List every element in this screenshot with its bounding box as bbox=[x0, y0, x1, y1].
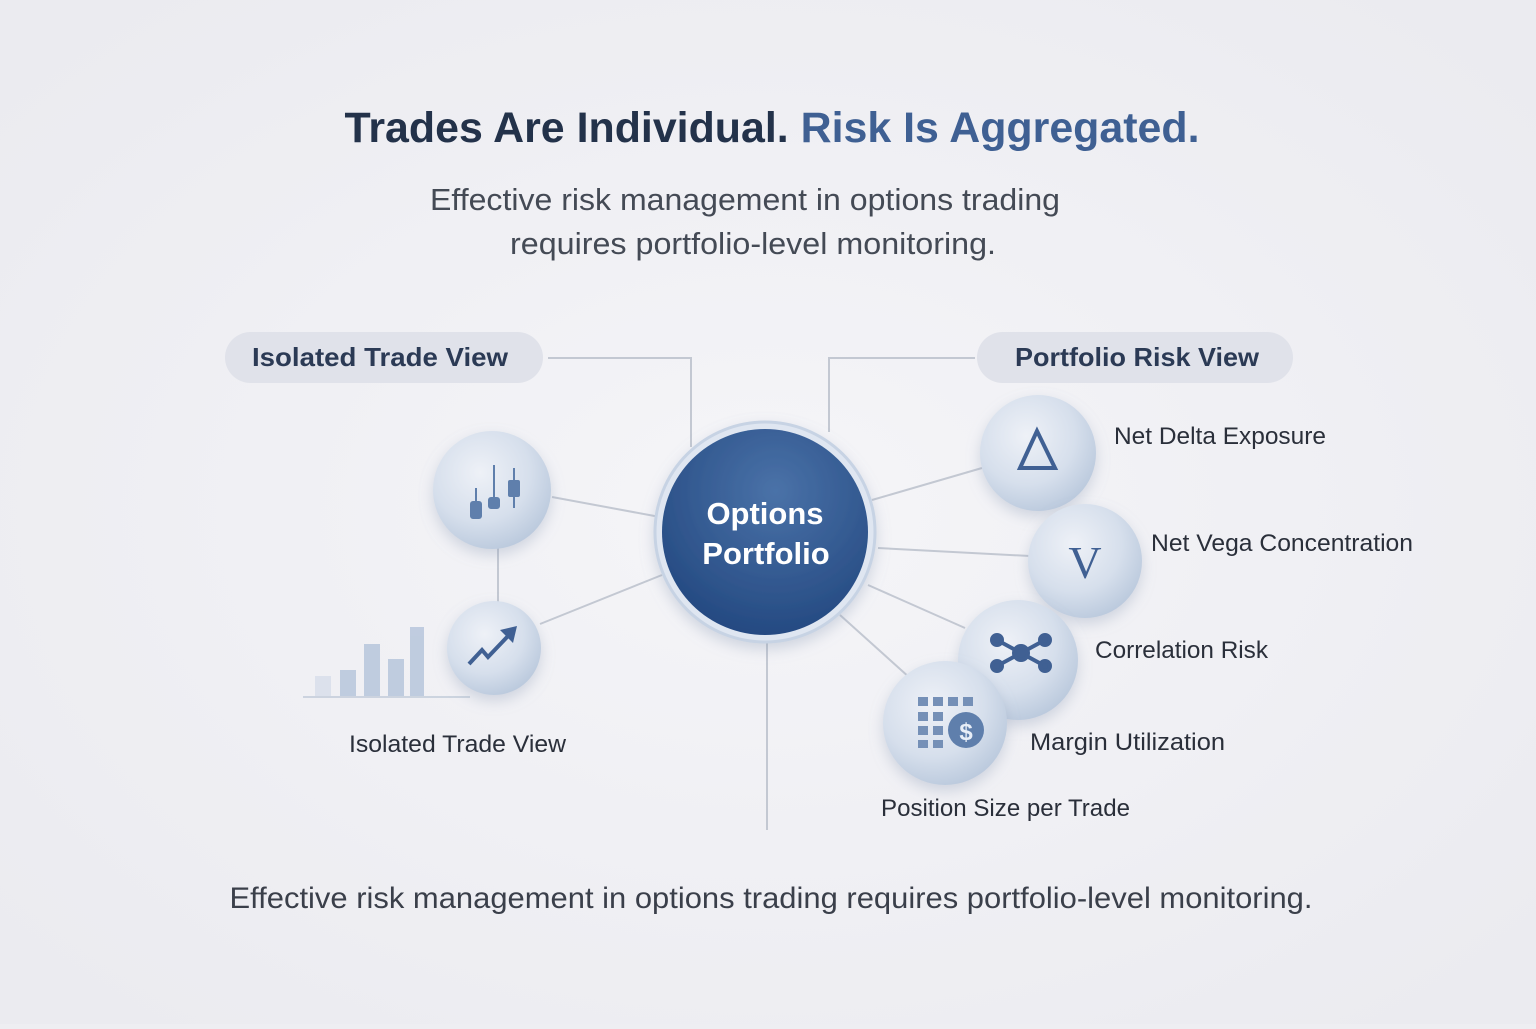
icon: margin bubble: $ bbox=[959, 719, 973, 746]
bar chart bbox=[303, 627, 470, 697]
subtitle bbox=[430, 182, 1060, 261]
icon: trend arrow bubble bbox=[447, 601, 541, 695]
subtitle: Effective risk management in options trading bbox=[430, 182, 1060, 217]
labels: Correlation Risk bbox=[1095, 637, 1269, 664]
pill: portfolio risk view bbox=[977, 332, 1293, 383]
pill: portfolio risk view: Portfolio Risk View bbox=[1015, 342, 1260, 372]
pill: isolated trade view: Isolated Trade View bbox=[252, 342, 509, 372]
icon: candlestick bubble bbox=[433, 431, 551, 549]
icon: correlation bubble bbox=[958, 600, 1078, 720]
subtitle: requires portfolio-level monitoring. bbox=[510, 226, 996, 261]
icon: vega bubble: V bbox=[1068, 537, 1102, 588]
labels: Margin Utilization bbox=[1030, 729, 1225, 756]
labels: Isolated Trade View bbox=[349, 731, 567, 758]
icon: delta bubble bbox=[980, 395, 1096, 511]
footer text: Effective risk management in options trading requires portfolio-level monitoring. bbox=[230, 882, 1312, 915]
labels bbox=[349, 423, 1413, 822]
labels: Position Size per Trade bbox=[881, 795, 1130, 822]
center: options portfolio: Portfolio bbox=[702, 536, 830, 571]
connector lines bbox=[498, 358, 1030, 830]
pill: isolated trade view bbox=[225, 332, 543, 383]
icon: vega bubble bbox=[1028, 504, 1142, 618]
center: options portfolio: Options bbox=[706, 496, 824, 531]
center: options portfolio bbox=[655, 422, 875, 642]
icon: margin bubble bbox=[883, 661, 1007, 785]
labels: Net Delta Exposure bbox=[1114, 423, 1326, 450]
title: Trades Are Individual. Risk Is Aggregated. bbox=[344, 104, 1200, 152]
labels: Net Vega Concentration bbox=[1151, 530, 1413, 557]
